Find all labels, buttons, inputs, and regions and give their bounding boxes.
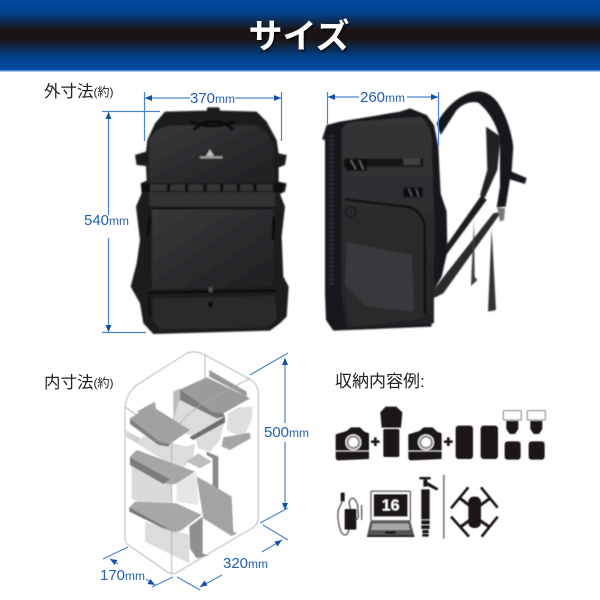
heading: outer dimensions: 外寸法: [44, 83, 94, 101]
icons: cameras, lenses and flashes: [336, 407, 545, 460]
icon: battery pack 1: [505, 441, 521, 460]
left top shelf: [137, 402, 157, 418]
dimension: 170mm: [100, 547, 173, 587]
dimension: 540mm: [84, 112, 160, 332]
middle shelf: [132, 465, 172, 518]
heading: outer dimensions: (約): [94, 84, 114, 99]
icon: drone: [451, 487, 498, 537]
title: サイズ: [249, 17, 349, 56]
dimension: 370mm: [144, 90, 282, 141]
front view backpack: [131, 107, 289, 334]
dimension: 500mm: 500mm: [264, 424, 309, 441]
upper right shelf: [173, 388, 180, 422]
icons: accessories: [338, 475, 498, 539]
icon: camera 2: [408, 427, 442, 460]
dimension: 320mm: [177, 525, 288, 590]
icon: plus: [444, 437, 453, 446]
icon: lens: [481, 426, 498, 459]
icon: flash 2: [527, 411, 545, 434]
shoulder strap: [437, 91, 527, 207]
icon: laptop: 16: [382, 498, 400, 515]
lower shelf: [145, 522, 189, 563]
icon: plus: [371, 437, 380, 446]
icon: battery pack 2: [529, 441, 545, 460]
transparent shell outline: [125, 352, 258, 574]
dimension: 540mm: 540mm: [84, 212, 129, 229]
header banner: [0, 0, 600, 72]
dimension: 370mm: 370mm: [190, 90, 235, 107]
icon: tripod: [419, 477, 438, 537]
dimension: 260mm: 260mm: [360, 89, 405, 106]
pack body: [322, 108, 447, 331]
icon: telephoto lens: [380, 407, 402, 457]
icon: AC adapter: [338, 493, 362, 535]
dimension: 260mm: [328, 89, 438, 146]
icon: lens: [456, 426, 473, 459]
icon: laptop: [367, 491, 414, 537]
heading: storage examples: 収納内容例:: [335, 372, 425, 391]
dimension: 320mm: 320mm: [223, 555, 268, 572]
heading: inner dimensions: (約): [94, 375, 114, 390]
icon: camera 1: [336, 427, 369, 460]
divider posts: [207, 452, 218, 507]
dimension: 170mm: 170mm: [100, 567, 145, 584]
divider: [443, 475, 445, 539]
inner compartment diagram: [125, 352, 258, 574]
side view backpack: [322, 91, 527, 331]
heading: inner dimensions: 内寸法: [44, 374, 94, 392]
dimension: 500mm: [250, 353, 309, 523]
icon: flash 1: [503, 411, 521, 434]
